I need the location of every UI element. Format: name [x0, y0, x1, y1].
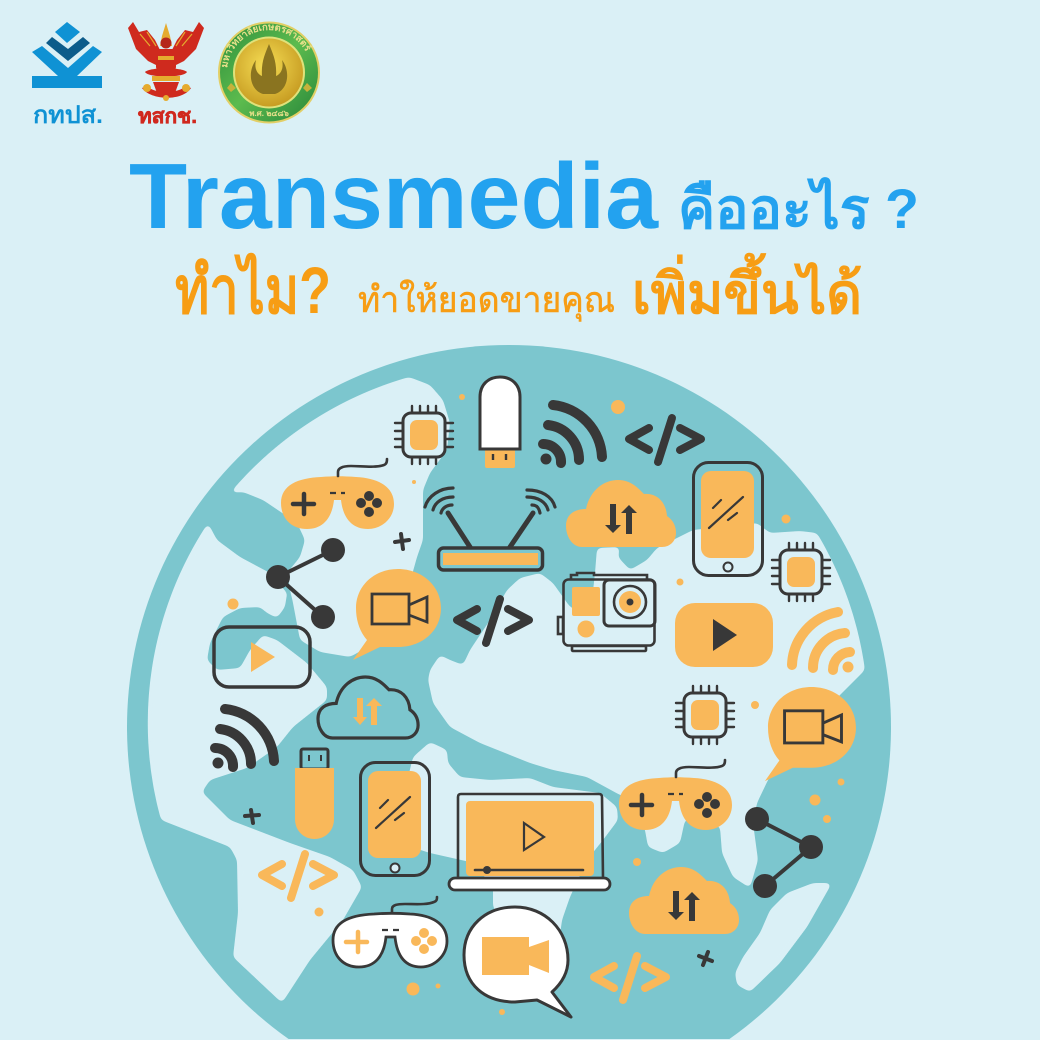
icon: router with antennas: [425, 488, 555, 570]
globe oceans: [148, 377, 865, 1003]
dots: orange accents: [228, 394, 844, 1015]
icon: gamepad orange top: [281, 459, 394, 529]
logo: ทสกช. garuda: [128, 22, 204, 128]
subtitle: ทำไม? ทำให้ยอดขายคุณ เพิ่มขึ้นได้: ทำให้ยอดขายคุณ: [358, 279, 615, 322]
icon: white speech bubble with video camera: [464, 907, 571, 1017]
icon: code orange bottom: [594, 956, 666, 1000]
logo: university seal: พ.ศ. ๒๔๘๖: [249, 109, 289, 118]
icon: code dark top: [629, 418, 701, 462]
title: Transmedia คืออะไร ?: [129, 144, 919, 248]
icon: chip top: [395, 406, 453, 464]
logo: ทสกช. garuda: ทสกช.: [138, 106, 197, 128]
icon: white usb drive: [480, 377, 520, 468]
subtitle: ทำไม? ทำให้ยอดขายคุณ เพิ่มขึ้นได้: ทำไม?: [175, 252, 331, 327]
icon: wifi dark top: [540, 405, 602, 464]
logo: university seal: มหาวิทยาลัยเกษตรศาสตร์: [222, 24, 313, 68]
icon: share dark left: [266, 538, 345, 629]
icon: speech bubble with video camera, left: [353, 569, 441, 660]
logo: กทปส.: [32, 22, 103, 129]
globe: [127, 345, 891, 1039]
icon: chip right: [772, 543, 830, 601]
icon: cloud orange lower right: [629, 867, 739, 934]
logo: กทปส.: กทปส.: [33, 102, 103, 129]
subtitle: ทำไม? ทำให้ยอดขายคุณ เพิ่มขึ้นได้: [175, 252, 862, 327]
plus marks: dark: [245, 534, 712, 965]
icon: speech bubble with video camera, right: [765, 687, 856, 781]
icon: share dark right: [745, 807, 823, 898]
globe disc: [127, 345, 891, 1039]
icon: wifi dark left: [212, 709, 274, 768]
icon: phone top: [694, 462, 762, 576]
title: Transmedia คืออะไร ?: คืออะไร ?: [678, 176, 919, 240]
icon: code dark centre: [457, 599, 529, 643]
icon: cloud orange top: [566, 480, 676, 547]
logo: university seal: [218, 22, 320, 124]
subtitle: ทำไม? ทำให้ยอดขายคุณ เพิ่มขึ้นได้: เพิ่มขึ้นได้: [632, 253, 862, 325]
icon: chip lower right: [676, 686, 734, 744]
icon: code orange left: [262, 854, 334, 898]
icon: phone left: [360, 762, 430, 876]
icon: action camera: [558, 573, 655, 651]
icon: video play orange: [675, 603, 773, 667]
title: Transmedia คืออะไร ?: Transmedia: [129, 144, 659, 248]
icon: orange usb drive: [295, 749, 334, 839]
icon: wifi orange: [792, 612, 854, 672]
icon: gamepad white: [333, 897, 447, 967]
icon: laptop: [449, 794, 610, 890]
icon: cloud outlined: [318, 677, 418, 738]
icon: gamepad orange right: [619, 760, 732, 830]
icon: video frame outlined: [214, 627, 310, 687]
